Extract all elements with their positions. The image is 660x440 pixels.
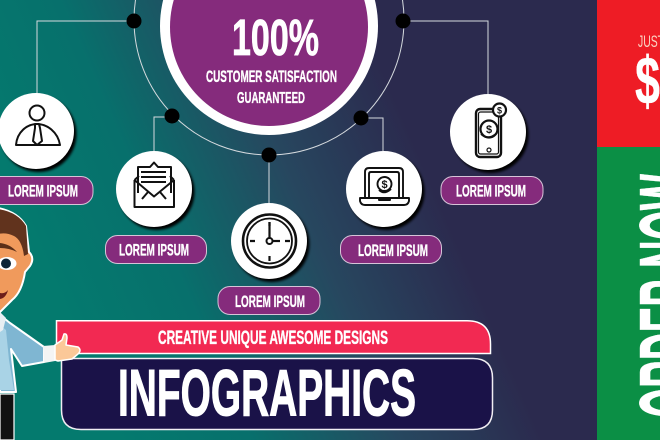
mouth — [0, 290, 8, 299]
pill label: LOREM IPSUM — [119, 240, 189, 260]
cartoon presenter — [0, 208, 80, 440]
pill label: LOREM IPSUM — [8, 182, 78, 200]
trousers — [0, 394, 14, 440]
icon: phone with coins: $ — [486, 124, 492, 136]
hair — [0, 209, 28, 256]
side panel: price — [597, 0, 660, 147]
central badge — [160, 0, 378, 135]
side panel: call to action — [597, 147, 660, 440]
eye — [0, 257, 16, 270]
title banner: navy — [62, 356, 492, 430]
icon: businessman — [16, 106, 60, 145]
connector dots — [126, 14, 410, 162]
icon: phone with coins — [476, 104, 506, 157]
pill label: LOREM IPSUM — [456, 182, 526, 200]
cuff — [43, 345, 55, 363]
node: smartphone — [441, 94, 543, 204]
icon: laptop: $ — [381, 179, 388, 191]
icon: phone with coins: $ — [497, 106, 502, 116]
head — [0, 208, 32, 312]
circular connector network — [37, 0, 488, 204]
eyebrow — [0, 243, 17, 252]
neck collar — [0, 312, 6, 332]
icon: envelope — [134, 162, 174, 207]
shirt torso and arm — [0, 315, 44, 392]
subtitle banner: pink — [56, 321, 490, 354]
subtitle text: CREATIVE UNIQUE AWESOME DESIGNS — [158, 328, 388, 349]
vest shade — [0, 325, 14, 390]
node: clock — [218, 203, 320, 314]
pill label: LOREM IPSUM — [235, 292, 305, 311]
hand — [55, 334, 80, 361]
main title: INFOGRAPHICS — [118, 356, 416, 430]
badge subtitle line 1: CUSTOMER SATISFACTION — [206, 67, 337, 86]
badge headline: 100% — [232, 9, 319, 66]
icon: clock — [243, 214, 296, 268]
node: envelope — [106, 151, 206, 264]
badge subtitle line 2: GUARANTEED — [237, 90, 305, 107]
node: person — [0, 93, 93, 204]
node: laptop — [340, 151, 442, 264]
pill label: LOREM IPSUM — [358, 241, 428, 260]
